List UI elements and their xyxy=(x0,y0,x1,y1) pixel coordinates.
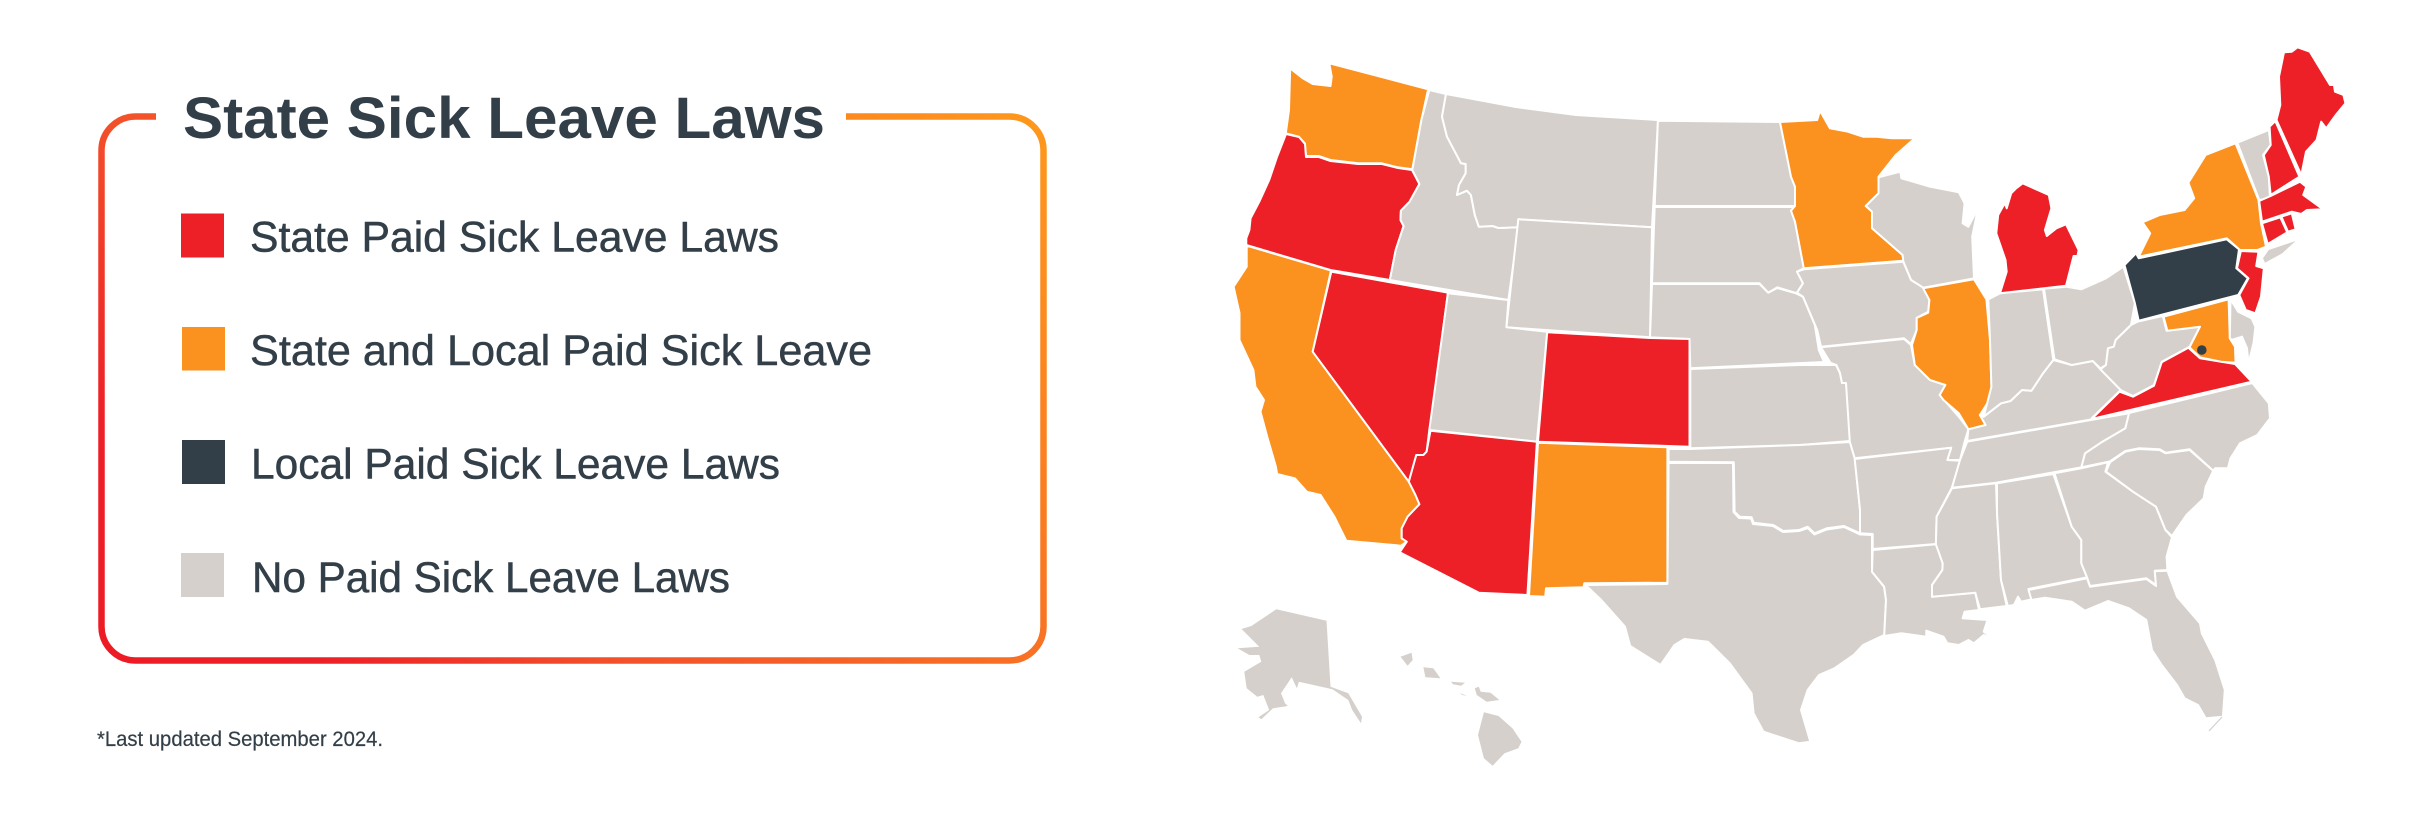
footnote: *Last updated September 2024. xyxy=(97,728,383,751)
Minnesota xyxy=(1780,111,1915,268)
Maine xyxy=(2276,47,2345,175)
Arizona xyxy=(1400,431,1537,595)
Rhode Island xyxy=(2281,213,2296,232)
Nevada xyxy=(1313,272,1448,482)
Missouri xyxy=(1821,339,1968,460)
Louisiana xyxy=(1872,544,1995,645)
map: contiguous states xyxy=(1234,47,2345,743)
New Jersey xyxy=(2237,251,2264,313)
Tennessee xyxy=(1952,413,2129,488)
title: State Sick Leave Laws xyxy=(183,86,825,151)
icon: Washington DC dot xyxy=(2197,345,2207,355)
legend item: none: No Paid Sick Leave Laws xyxy=(252,554,730,602)
Delaware and eastern shore xyxy=(2230,299,2255,363)
Hawaii xyxy=(1400,653,1522,766)
Kansas xyxy=(1690,365,1850,448)
Florida Keys xyxy=(2209,717,2222,731)
Indiana xyxy=(1984,289,2053,417)
New York xyxy=(2139,143,2266,257)
Washington xyxy=(1286,63,1428,169)
Alabama xyxy=(1997,474,2087,606)
South Dakota xyxy=(1652,207,1804,293)
panel: legend xyxy=(102,86,1044,660)
North Dakota xyxy=(1655,121,1795,206)
Massachusetts xyxy=(2259,182,2323,222)
New Hampshire xyxy=(2264,121,2299,195)
Long Island xyxy=(2263,241,2296,263)
Kentucky xyxy=(1967,360,2121,441)
legend item: local: Local Paid Sick Leave Laws xyxy=(251,440,780,488)
Wisconsin xyxy=(1866,172,1978,288)
Georgia xyxy=(2054,462,2172,586)
New Mexico xyxy=(1529,443,1667,597)
Utah xyxy=(1429,293,1547,442)
South Carolina xyxy=(2106,449,2213,536)
Virginia xyxy=(2092,348,2252,419)
Alaska xyxy=(1238,609,1362,723)
West Virginia xyxy=(2100,316,2200,396)
Arkansas xyxy=(1855,448,1960,549)
Pennsylvania xyxy=(2124,239,2248,321)
Mississippi xyxy=(1932,483,2007,609)
Texas xyxy=(1586,463,1886,743)
Oklahoma xyxy=(1669,442,1860,533)
legend gradient border xyxy=(102,116,1044,660)
North Carolina xyxy=(2081,383,2270,471)
Montana xyxy=(1442,94,1658,228)
Ohio xyxy=(2044,267,2135,368)
Illinois xyxy=(1912,279,1991,429)
Iowa xyxy=(1797,262,1929,347)
legend item: state paid: State Paid Sick Leave Laws xyxy=(250,214,779,262)
Michigan xyxy=(1996,183,2079,293)
Oregon xyxy=(1246,134,1419,280)
Maryland xyxy=(2164,299,2236,363)
legend item: state and local: State and Local Paid Sick Leave xyxy=(250,327,872,375)
Florida xyxy=(2028,571,2225,718)
California xyxy=(1234,246,1419,546)
Connecticut xyxy=(2262,217,2287,244)
Wyoming xyxy=(1506,219,1652,337)
Colorado xyxy=(1538,332,1690,447)
Vermont xyxy=(2237,130,2271,200)
Idaho xyxy=(1390,90,1518,300)
Nebraska xyxy=(1650,284,1824,368)
